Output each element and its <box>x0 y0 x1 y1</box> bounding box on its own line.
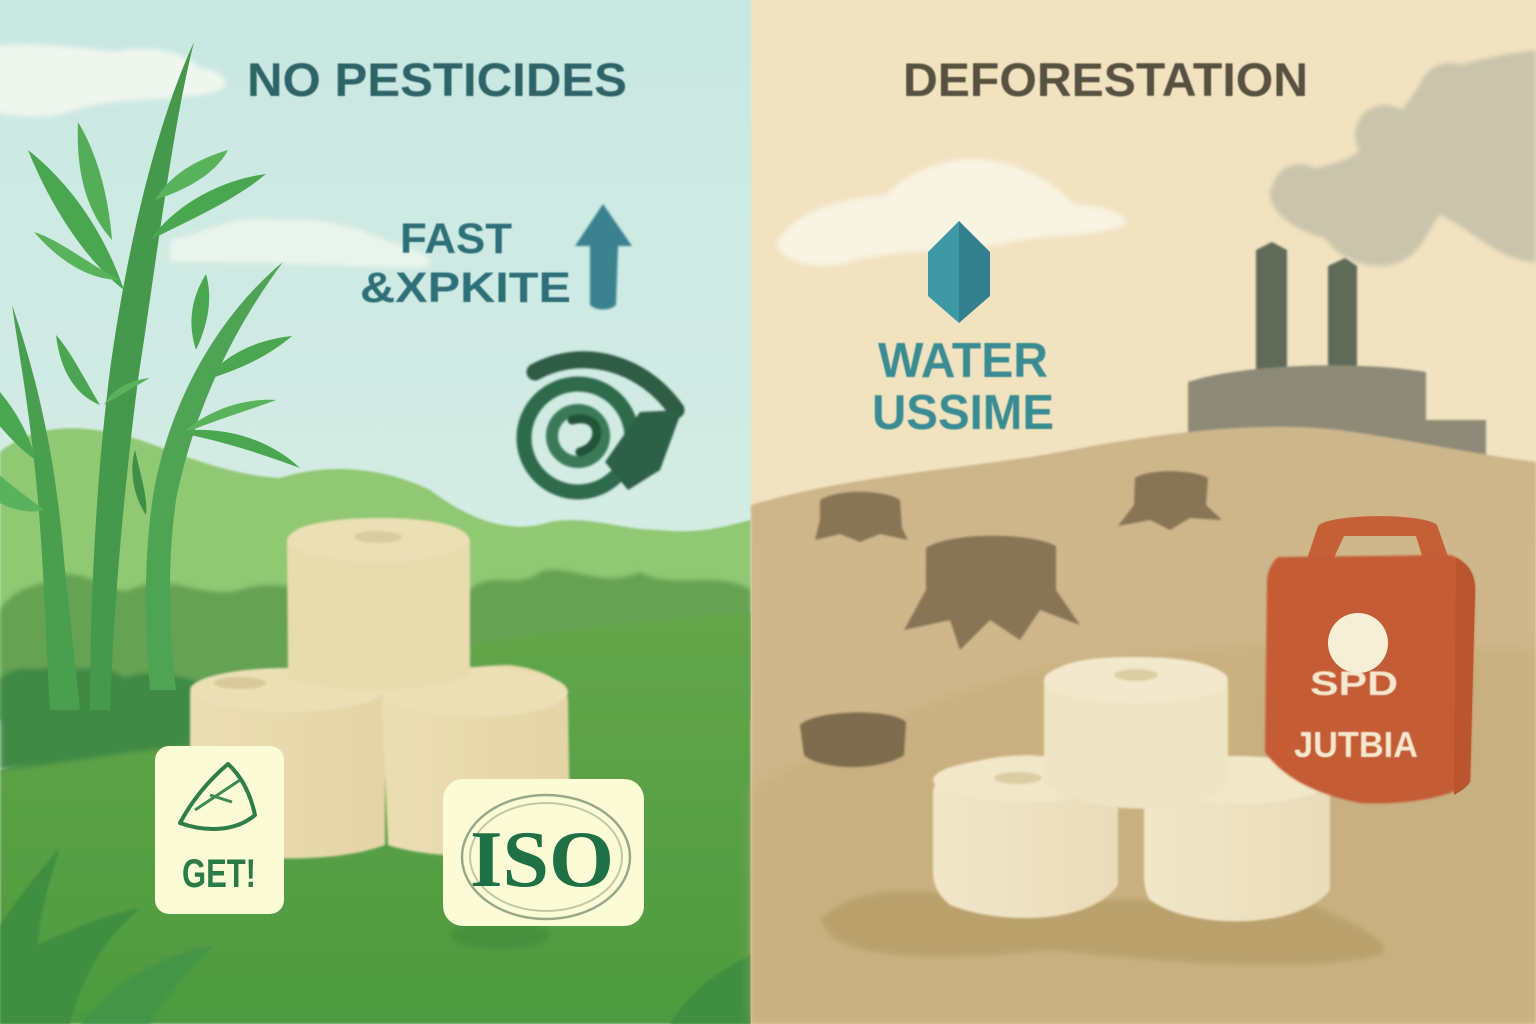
panel: bamboo side <box>0 0 751 1024</box>
leaves <box>28 150 124 290</box>
bag label text <box>1294 665 1418 765</box>
ground <box>751 427 1536 1024</box>
text: fast growth: &XPKITE <box>360 264 571 312</box>
smoke cloud <box>1270 50 1536 266</box>
badge: ISO <box>443 779 644 926</box>
bamboo plants <box>0 42 300 710</box>
roll: bottom right <box>382 665 570 856</box>
roll: bottom left <box>190 668 385 858</box>
bag label text: JUTBIA <box>1294 724 1418 765</box>
text: water usage <box>872 334 1054 440</box>
grass field <box>0 612 751 1024</box>
icon: foreground grass <box>0 848 140 1024</box>
roll: bottom right <box>1144 756 1330 921</box>
stump: right <box>1118 471 1222 530</box>
icon: recycling swirl <box>524 360 682 492</box>
icon: water drop <box>928 221 990 323</box>
stump: cut log <box>800 713 906 767</box>
heading: no pesticides: NO PESTICIDES <box>247 53 627 106</box>
dark shrubs <box>0 665 230 770</box>
ground shadow under rolls <box>820 891 1385 965</box>
cloud <box>776 159 1126 266</box>
bag emblem <box>1328 613 1388 673</box>
text: water usage: WATER <box>878 334 1048 388</box>
toilet paper rolls: pyramid <box>190 518 570 858</box>
icon: up arrow <box>575 204 632 310</box>
toilet paper rolls: pyramid <box>933 657 1330 921</box>
roll: top <box>1044 657 1228 809</box>
badge: eco label <box>155 746 284 914</box>
stump: centre <box>904 536 1080 650</box>
chimney left <box>1256 242 1287 370</box>
cloud: middle <box>170 218 430 268</box>
chimney right <box>1328 258 1357 370</box>
stump: left <box>815 492 908 542</box>
icon: leaf outline <box>180 764 255 829</box>
factory <box>1188 242 1486 470</box>
roll: top <box>287 518 470 690</box>
text: fast growth: FAST <box>400 215 512 263</box>
heading: deforestation: DEFORESTATION <box>903 53 1308 106</box>
cloud: top left <box>0 45 226 117</box>
ISO text: ISO <box>470 816 614 904</box>
icon: red bag <box>1265 516 1475 803</box>
roll: bottom left <box>933 755 1118 918</box>
stalks <box>90 42 194 710</box>
stumps <box>800 471 1222 767</box>
badge text: GET! <box>182 852 256 896</box>
panel: wood pulp side <box>751 0 1536 1024</box>
text: fast growth <box>360 215 571 312</box>
bag label text: SPD <box>1310 665 1398 703</box>
tree line <box>0 570 751 720</box>
text: water usage: USSIME <box>872 386 1054 440</box>
far hills <box>0 428 751 720</box>
